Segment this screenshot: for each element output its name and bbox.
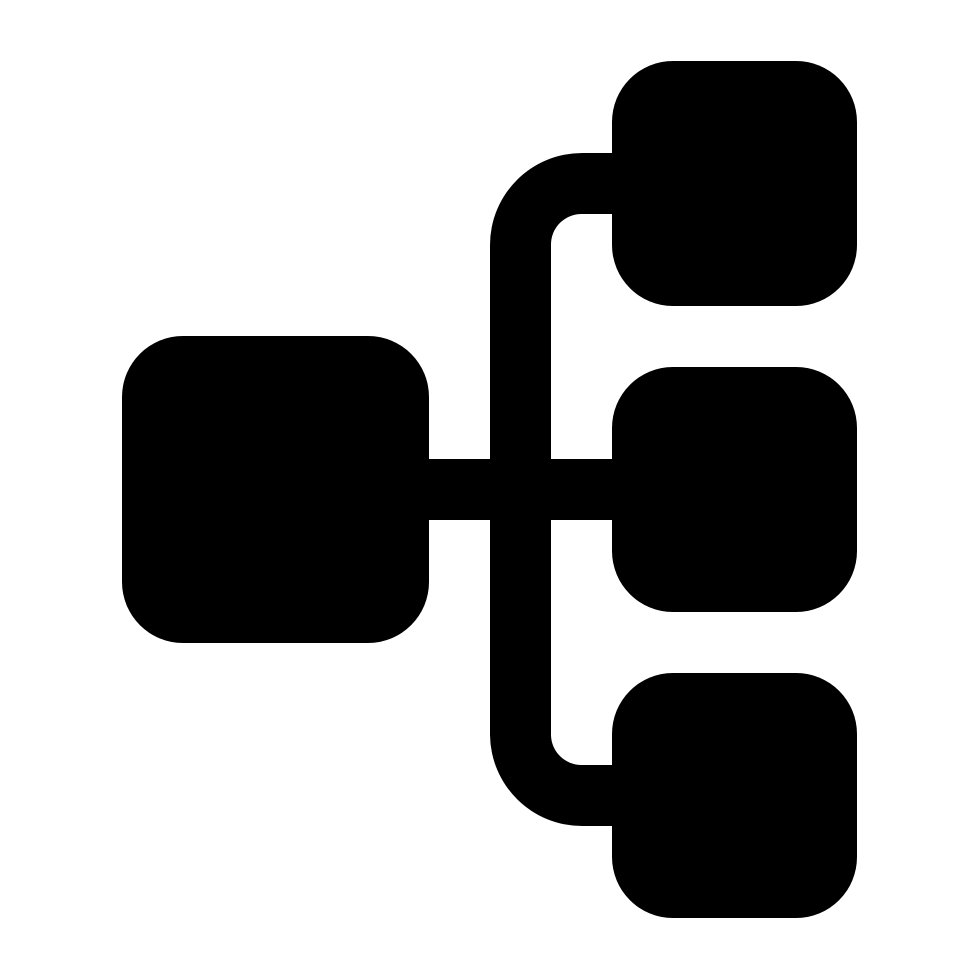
- child node: top: [612, 61, 857, 306]
- child node: middle: [612, 367, 857, 612]
- child node: bottom: [612, 673, 857, 918]
- root node: [122, 336, 429, 643]
- connector lines: [429, 153, 612, 826]
